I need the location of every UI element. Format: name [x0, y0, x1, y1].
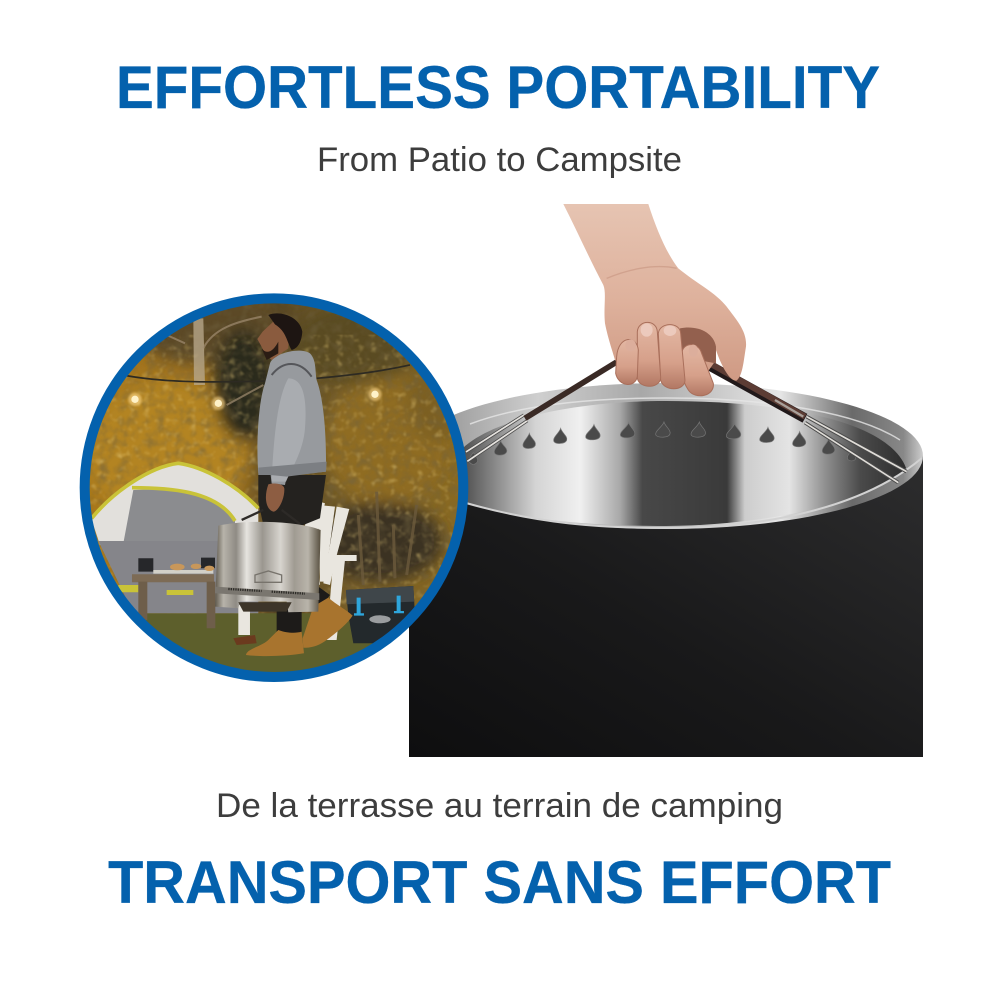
flame cut-outs [469, 422, 856, 465]
ring finger [658, 325, 685, 389]
hand [563, 204, 746, 396]
middle finger [637, 322, 661, 386]
adirondack chair [238, 501, 357, 640]
title: French: TRANSPORT SANS EFFORT [108, 849, 891, 916]
small fire pit [215, 510, 321, 612]
index finger [616, 339, 638, 384]
table with food [132, 558, 215, 628]
blue ring [85, 298, 463, 677]
bare trees [193, 318, 205, 385]
wrist and palm [563, 204, 746, 381]
foliage texture light [87, 335, 462, 618]
boots [246, 630, 304, 656]
pit body [409, 456, 923, 757]
foliage texture dark [87, 302, 462, 618]
string lights [127, 365, 410, 382]
cooler [346, 586, 415, 643]
hoodie [257, 351, 326, 485]
head and neck [257, 321, 289, 360]
subtitle: English: From Patio to Campsite [317, 141, 682, 179]
carry handles [466, 362, 907, 483]
photo: man carrying fire pit at campsite, in blue ring [85, 292, 467, 685]
pit rim [409, 383, 923, 529]
tent [92, 463, 258, 613]
grass [146, 613, 373, 672]
product: black fire pit held by a hand [409, 204, 923, 757]
pinky [681, 345, 713, 396]
front rim highlight [466, 458, 922, 528]
title: English: EFFORTLESS PORTABILITY [116, 54, 880, 121]
trousers [258, 475, 326, 525]
palm shadow [680, 327, 716, 363]
hand [266, 483, 284, 512]
subtitle: French: De la terrasse au terrain de camping [216, 787, 783, 825]
hair [268, 313, 302, 350]
pit interior wall [452, 401, 906, 526]
fingernails [625, 323, 698, 357]
man [246, 313, 353, 656]
leaves on ground [233, 635, 257, 645]
foliage background [87, 292, 467, 582]
inner lip line [470, 398, 900, 440]
